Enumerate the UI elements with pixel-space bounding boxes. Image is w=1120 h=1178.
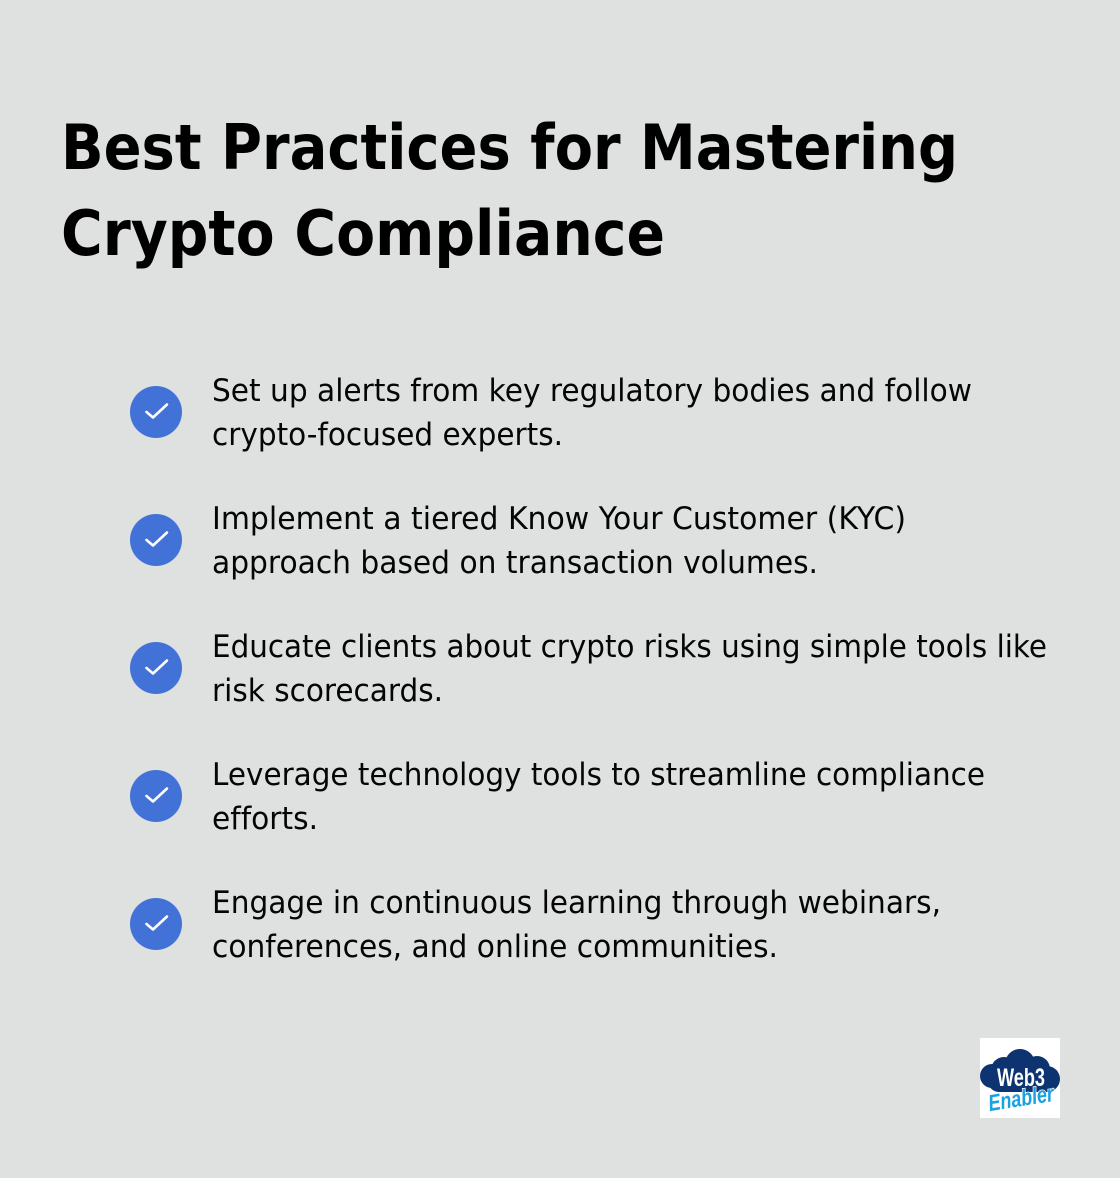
title: Crypto Compliance (61, 197, 665, 270)
item 4: technology (130, 757, 985, 837)
text: item 4: Leverage technology tools to streamline compliance (212, 757, 985, 793)
icon: check 4 (130, 770, 182, 822)
item 2: KYC (130, 501, 906, 581)
title: Best Practices for Mastering (61, 111, 958, 184)
text: item 5: conferences, and online communities. (212, 929, 778, 965)
text: item 1 (212, 373, 972, 453)
text: item 5 (212, 885, 941, 965)
text: item 3: risk scorecards. (212, 673, 443, 709)
icon: check 1 (130, 386, 182, 438)
text: item 3 (212, 629, 1047, 709)
text: item 1: crypto-focused experts. (212, 417, 563, 453)
item 5: learning (130, 885, 941, 965)
logo: Web3 Enabler: Web3 (997, 1064, 1045, 1092)
text: item 2 (212, 501, 906, 581)
icon: check 5 (130, 898, 182, 950)
icon: check 3 (130, 642, 182, 694)
text: item 5: Engage in continuous learning through webinars, (212, 885, 941, 921)
text: item 4: efforts. (212, 801, 318, 837)
logo: Web3 Enabler: Enabler (986, 1080, 1056, 1116)
logo: Web3 Enabler (980, 1038, 1060, 1118)
icon: check 2 (130, 514, 182, 566)
text: item 3: Educate clients about crypto risks using simple tools like (212, 629, 1047, 665)
text: item 2: approach based on transaction volumes. (212, 545, 818, 581)
checklist (130, 373, 1047, 965)
item 1: alerts (130, 373, 972, 453)
text: item 1: Set up alerts from key regulatory bodies and follow (212, 373, 972, 409)
text: item 4 (212, 757, 985, 837)
icon: cloud (980, 1049, 1060, 1092)
text: item 2: Implement a tiered Know Your Customer (KYC) (212, 501, 906, 537)
title (61, 111, 958, 270)
item 3: educate (130, 629, 1047, 709)
